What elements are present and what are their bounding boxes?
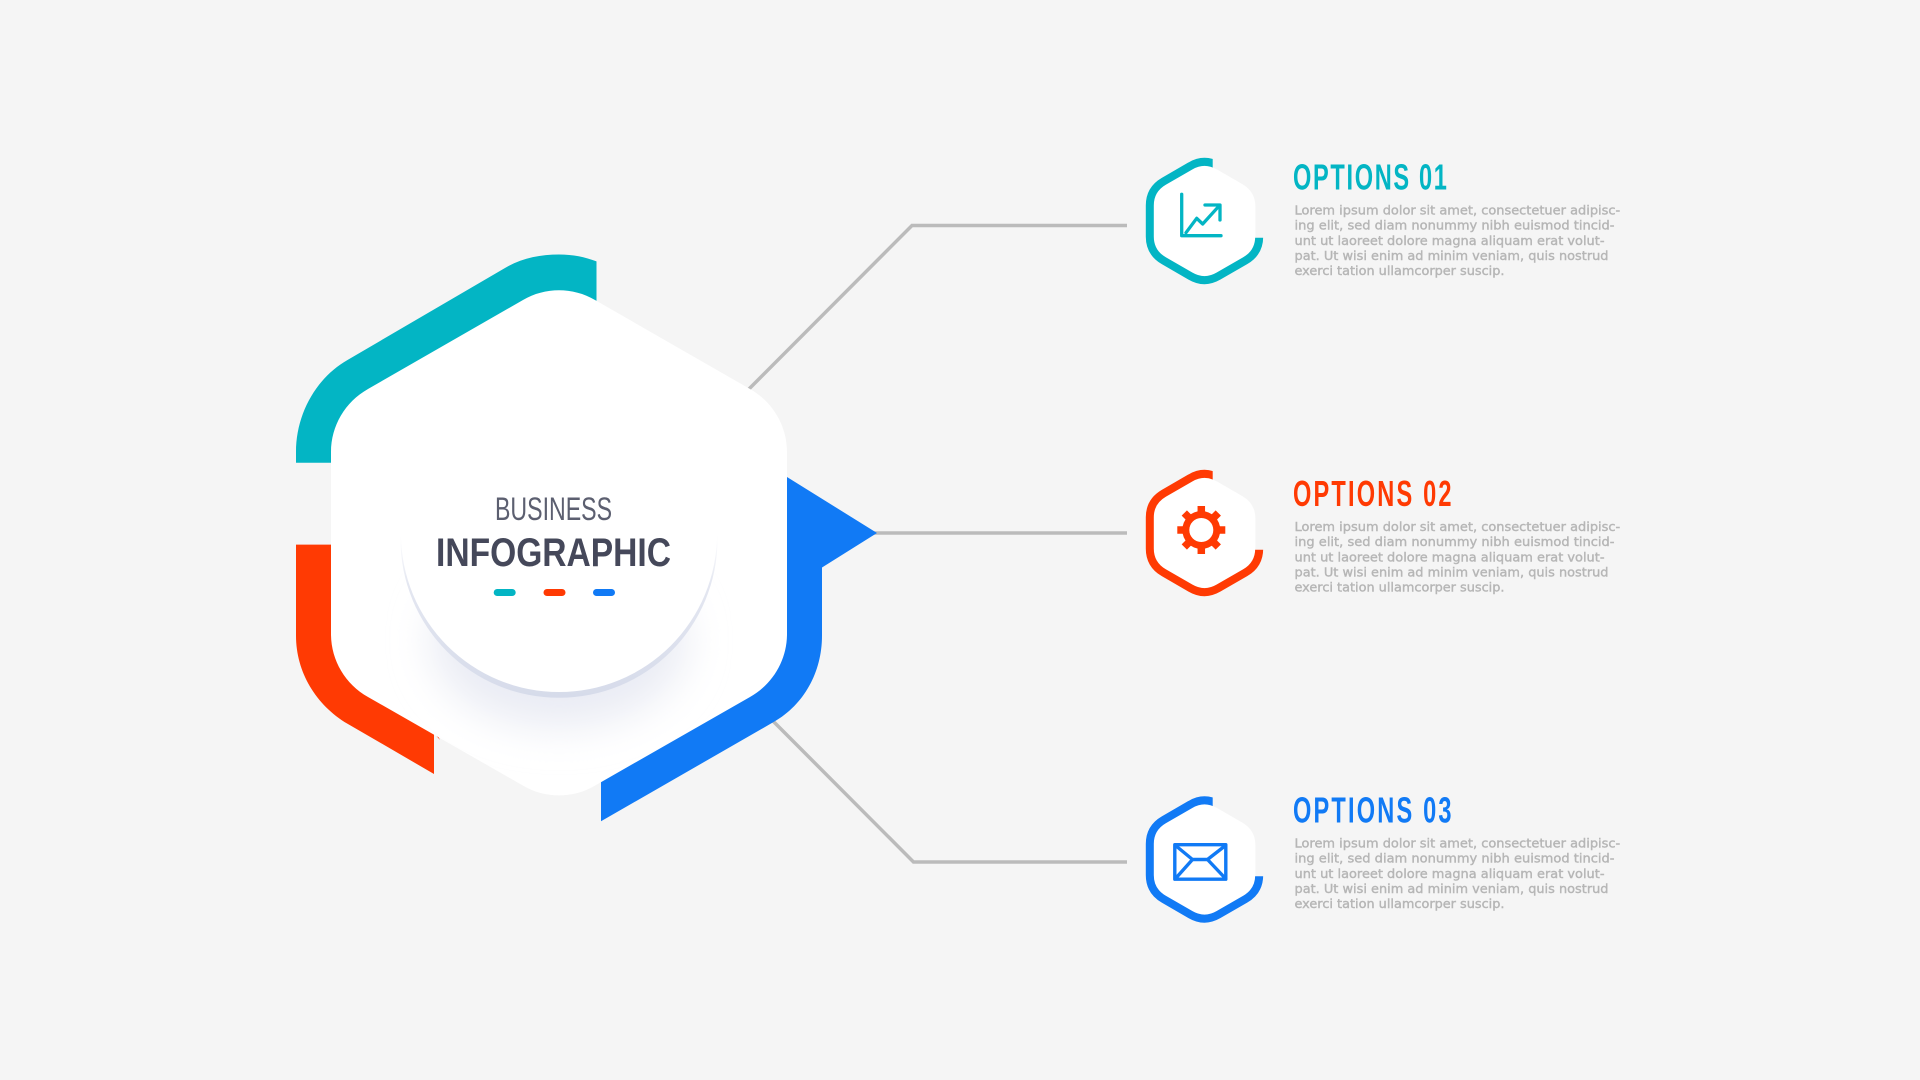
connector: top [745,226,1127,393]
red arc segment [296,545,440,774]
option 01 body: exerci tation ullamcorper suscip. [1294,263,1504,278]
option 03 body: exerci tation ullamcorper suscip. [1294,896,1504,911]
option 02 heading: OPTIONS 02 [1293,474,1452,514]
option 01 body: unt ut laoreet dolore magna aliquam erat volut- [1294,233,1604,248]
connector: middle [870,531,1127,535]
option 03 body: ing elit, sed diam nonummy nibh euismod tincid- [1294,851,1614,866]
circle shadow [429,632,689,732]
option 01 body: ing elit, sed diam nonummy nibh euismod tincid- [1294,218,1614,233]
option 03 icon [1150,800,1259,919]
option 02 body: exerci tation ullamcorper suscip. [1294,580,1504,595]
option 03 body: Lorem ipsum dolor sit amet, consectetuer adipisc- [1294,836,1620,850]
blue arc segment with pointer [601,477,877,821]
teal arc segment [296,254,596,463]
legend dashes [494,589,615,596]
connector lines [745,226,1127,862]
circle edge [400,381,718,698]
connector: bottom [770,718,1127,862]
option 02 body: unt ut laoreet dolore magna aliquam erat volut- [1294,549,1604,564]
option 02 icon [1150,474,1259,592]
white hexagon [331,290,787,795]
option 02 body: ing elit, sed diam nonummy nibh euismod tincid- [1294,534,1614,549]
title: business: BUSINESS [495,491,612,527]
option 01 body: pat. Ut wisi enim ad minim veniam, quis nostrud [1294,248,1608,263]
option 02 body [1294,519,1620,595]
option 03 body: unt ut laoreet dolore magna aliquam erat volut- [1294,866,1604,881]
option 02 text [1293,474,1620,595]
option 01 body: Lorem ipsum dolor sit amet, consectetuer adipisc- [1294,202,1620,218]
option 01 heading: OPTIONS 01 [1293,157,1447,198]
option 03 heading: OPTIONS 03 [1293,790,1452,831]
option 01 text [1293,157,1620,278]
white circle [401,376,717,692]
option 02 body: pat. Ut wisi enim ad minim veniam, quis nostrud [1294,564,1608,580]
option 02 body: Lorem ipsum dolor sit amet, consectetuer adipisc- [1294,519,1620,534]
option 01 body [1294,202,1620,278]
option 03 body: pat. Ut wisi enim ad minim veniam, quis nostrud [1294,881,1608,896]
option 01 icon [1150,162,1259,280]
option 03 body [1294,836,1620,911]
option 03 text [1293,790,1620,911]
central hexagon [296,254,877,821]
title: infographic: INFOGRAPHIC [436,531,671,575]
